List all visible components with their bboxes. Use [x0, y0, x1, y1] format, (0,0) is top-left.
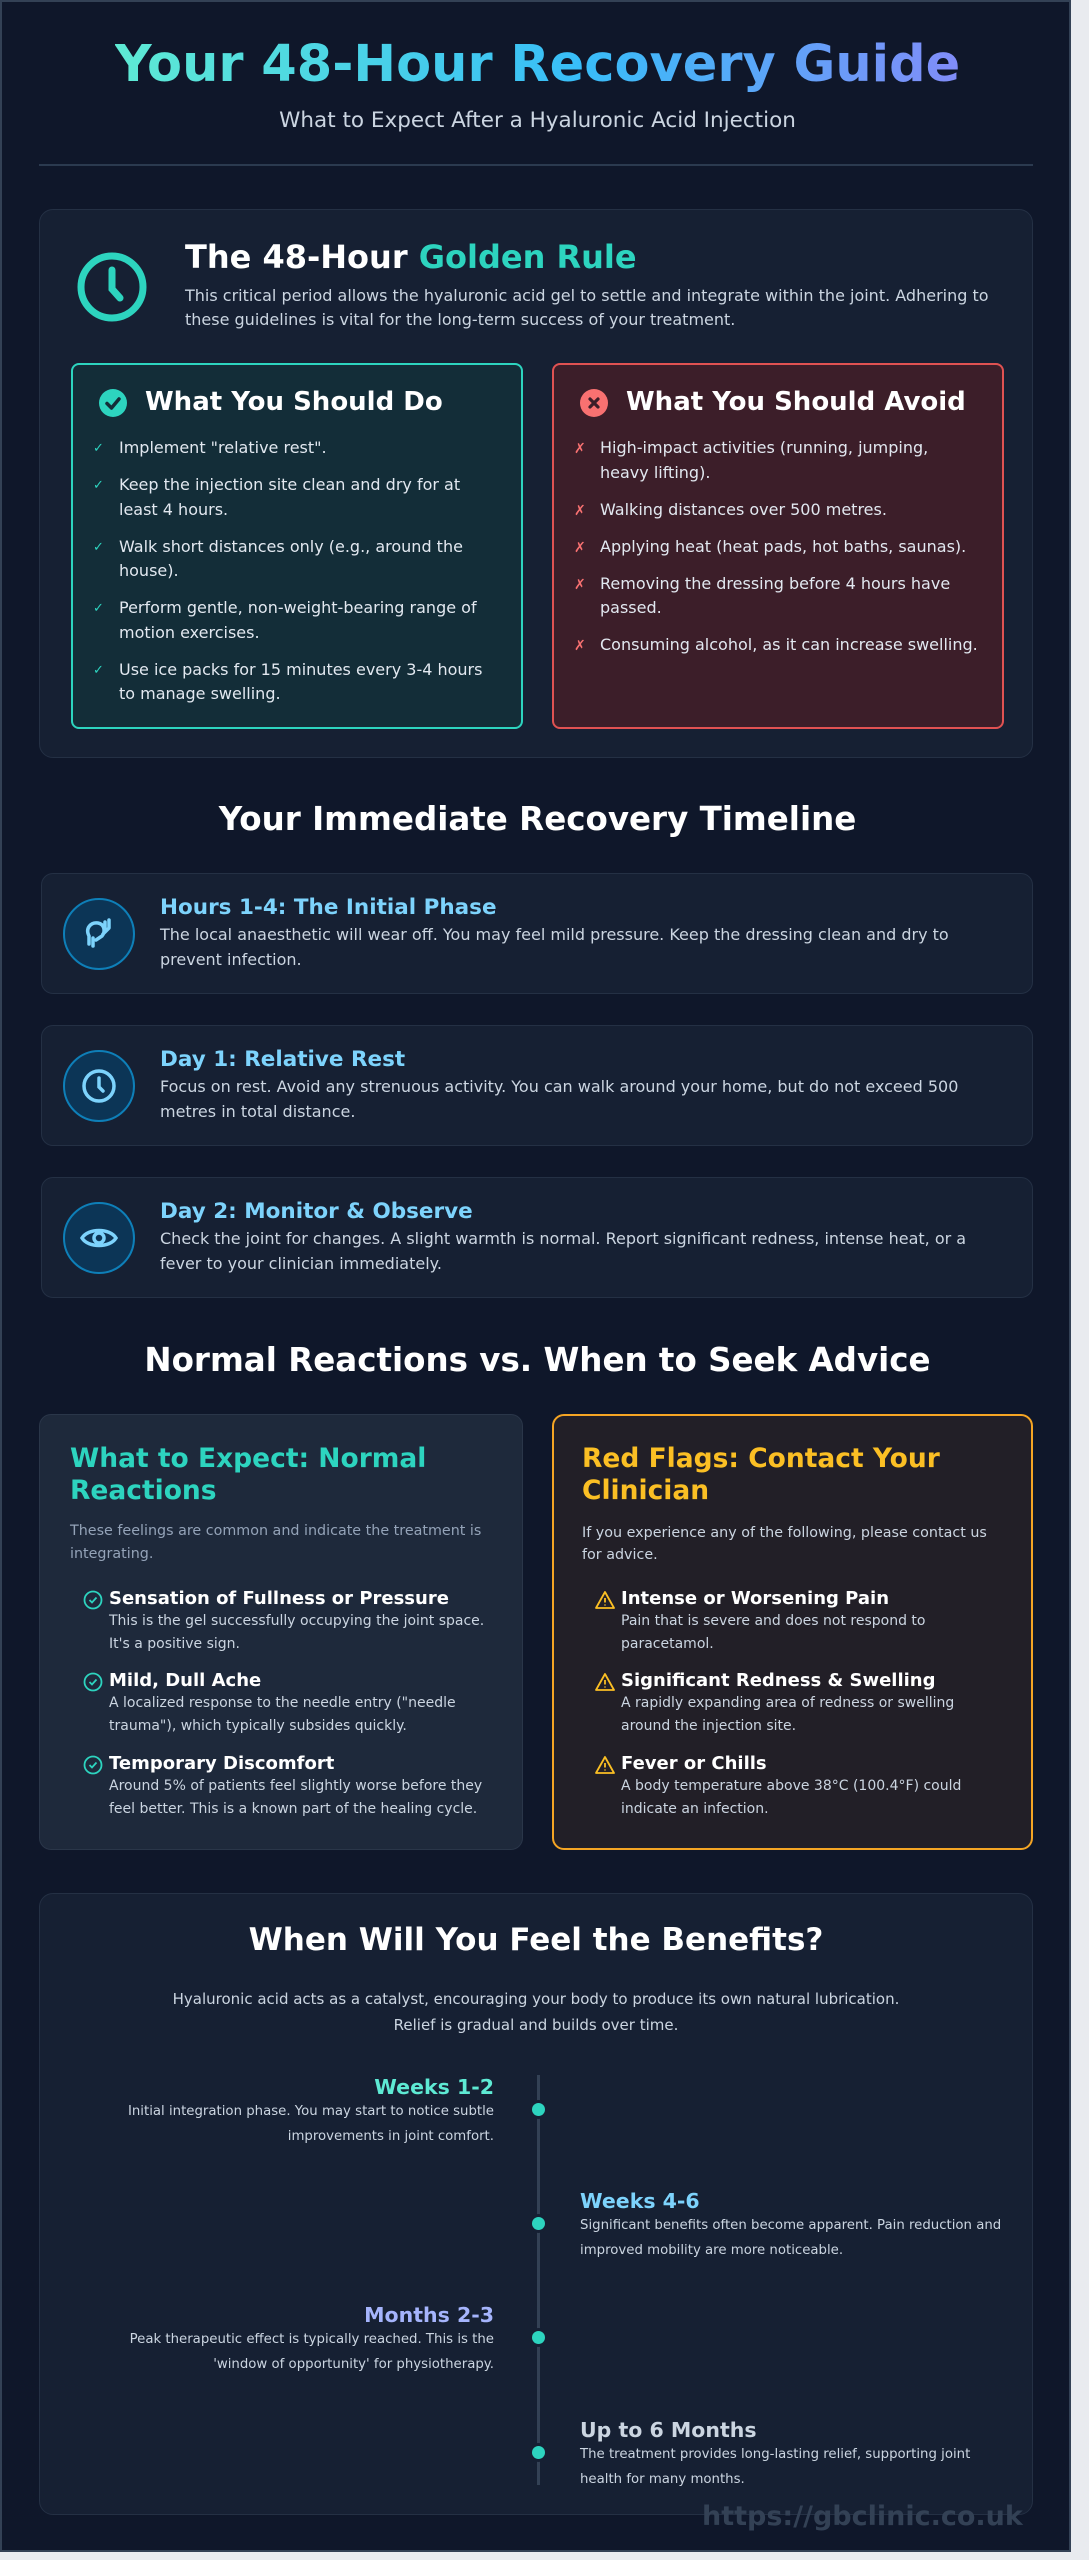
item: fever: A body temperature above 38°C (100.4°F) could indicate an infection. [621, 1778, 961, 1817]
intro: Relief is gradual and builds over time. [394, 2016, 678, 2034]
dot [532, 2446, 545, 2459]
milestone: weeks 1-2 [128, 2075, 494, 2144]
list: do: ✓ [93, 540, 104, 554]
item: pain: Intense or Worsening Pain [621, 1588, 889, 1609]
intro: Hyaluronic acid acts as a catalyst, encouraging your body to produce its own natural lubrication. [173, 1990, 899, 2008]
timeline card: day 2 [41, 1177, 1033, 1298]
heading: What to Expect: Normal Reactions [70, 1443, 426, 1506]
item: fullness: This is the gel successfully occupying the joint space. It's a positive sign. [109, 1613, 484, 1652]
heading: Red Flags: Contact Your Clinician [582, 1443, 940, 1506]
item: ache: A localized response to the needle entry ("needle trauma"), which typically subsides quickly. [109, 1695, 456, 1734]
milestone: weeks 4-6: Significant benefits often become apparent. Pain reduction and improved mobility are more noticeable. [580, 2218, 1001, 2258]
dot [532, 2331, 545, 2344]
list: avoid: ✗ [574, 441, 586, 457]
item: redness [595, 1670, 954, 1734]
milestone: weeks 4-6 [580, 2189, 1001, 2258]
heading: immediate recovery timeline: Your Immediate Recovery Timeline [219, 800, 856, 838]
item: fullness: Sensation of Fullness or Pressure [109, 1588, 449, 1609]
list: do: Implement "relative rest". [119, 438, 327, 457]
heading: When Will You Feel the Benefits? [249, 1922, 823, 1958]
intro: These feelings are common and indicate the treatment is integrating. [70, 1523, 481, 1562]
list: avoid: Consuming alcohol, as it can increase swelling. [600, 635, 978, 654]
list: do [93, 438, 482, 703]
watermark: https://gbclinic.co.uk [702, 2501, 1023, 2532]
item: pain [595, 1588, 926, 1652]
title: Your 48-Hour Recovery Guide [115, 35, 960, 94]
description: The local anaesthetic will wear off. You may feel mild pressure. Keep the dressing clean and dry to prevent infection. [160, 925, 949, 968]
title: Day 2: Monitor & Observe [160, 1199, 473, 1224]
description: This critical period allows the hyaluronic acid gel to settle and integrate within the joint. Adhering to these guidelines is vital for the long-term success of your treatment. [185, 286, 989, 329]
description: Focus on rest. Avoid any strenuous activity. You can walk around your home, but do not exceed 500 metres in total distance. [160, 1077, 958, 1120]
subtitle: What to Expect After a Hyaluronic Acid Injection [279, 108, 796, 133]
list: avoid: ✗ [574, 638, 586, 654]
list: avoid: ✗ [574, 576, 586, 592]
heading: normal vs seek advice: Normal Reactions vs. When to Seek Advice [144, 1341, 931, 1379]
milestone: weeks 4-6: Weeks 4-6 [580, 2189, 700, 2213]
panel: benefits [39, 1893, 1033, 2515]
dot [532, 2217, 545, 2230]
icon: clock [78, 252, 146, 322]
milestone: up to 6 months [580, 2418, 970, 2486]
milestone: up to 6 months: Up to 6 Months [580, 2418, 757, 2442]
heading: The 48-Hour Golden Rule [185, 238, 637, 276]
panel: red flags [552, 1414, 1033, 1850]
icon: eye [63, 1202, 135, 1274]
item: redness: Significant Redness & Swelling [621, 1670, 936, 1691]
milestone: weeks 1-2: Initial integration phase. You may start to notice subtle improvements in joint comfort. [128, 2104, 494, 2144]
title: Hours 1-4: The Initial Phase [160, 895, 497, 920]
box: what you should avoid [552, 363, 1004, 729]
item: discomfort: Around 5% of patients feel slightly worse before they feel better. This is a known part of the healing cycle. [109, 1778, 482, 1817]
list: do: Use ice packs for 15 minutes every 3-4 hours to manage swelling. [119, 660, 482, 703]
milestone: weeks 1-2: Weeks 1-2 [374, 2075, 494, 2099]
item: discomfort [84, 1753, 482, 1817]
panel: normal reactions [39, 1414, 523, 1850]
timeline card: day 1 [41, 1025, 1033, 1146]
intro [173, 1990, 899, 2034]
panel: golden rule [39, 209, 1033, 758]
timeline card: hours 1-4 [41, 873, 1033, 994]
list: do: Keep the injection site clean and dry for at least 4 hours. [119, 475, 460, 518]
item: fever: Fever or Chills [621, 1753, 767, 1774]
item: ache: Mild, Dull Ache [109, 1670, 261, 1691]
list: do: Walk short distances only (e.g., around the house). [119, 536, 463, 580]
list: avoid: Walking distances over 500 metres. [600, 500, 887, 518]
item: discomfort: Temporary Discomfort [109, 1753, 334, 1774]
list: do: ✓ [93, 478, 104, 493]
item: ache [84, 1670, 456, 1734]
milestone: up to 6 months: The treatment provides long-lasting relief, supporting joint health for many months. [580, 2447, 970, 2486]
intro: If you experience any of the following, please contact us for advice. [582, 1525, 987, 1563]
item: fullness [84, 1588, 484, 1652]
icon: clock [63, 1050, 135, 1122]
list: avoid: Removing the dressing before 4 hours have passed. [600, 574, 950, 617]
title: Day 1: Relative Rest [160, 1047, 405, 1072]
list: avoid: ✗ [574, 502, 586, 518]
list: avoid [574, 438, 978, 654]
list: do: ✓ [93, 601, 104, 616]
list: avoid: ✗ [574, 540, 586, 556]
timeline line [537, 2075, 540, 2485]
list: avoid: High-impact activities (running, jumping, heavy lifting). [600, 438, 928, 482]
milestone: months 2-3: Months 2-3 [364, 2303, 494, 2327]
box heading: What You Should Avoid [626, 387, 966, 417]
box heading: What You Should Do [145, 387, 443, 417]
description: Check the joint for changes. A slight warmth is normal. Report significant redness, intense heat, or a fever to your clinician immediately. [160, 1229, 966, 1272]
item: fever [595, 1753, 961, 1817]
milestone: months 2-3 [130, 2303, 494, 2372]
item: pain: Pain that is severe and does not respond to paracetamol. [621, 1613, 926, 1652]
box: what you should do [71, 363, 523, 729]
list: avoid: Applying heat (heat pads, hot baths, saunas). [600, 536, 966, 556]
list: do: ✓ [93, 662, 104, 678]
item: redness: A rapidly expanding area of redness or swelling around the injection site. [621, 1695, 954, 1734]
list: do: ✓ [93, 441, 104, 456]
milestone: months 2-3: Peak therapeutic effect is typically reached. This is the 'window of opportunity' for physiotherapy. [130, 2332, 494, 2372]
icon: x circle [580, 389, 608, 417]
icon: check circle [99, 389, 127, 417]
icon: hand [63, 898, 135, 970]
list: do: Perform gentle, non-weight-bearing range of motion exercises. [119, 598, 477, 642]
dot [532, 2103, 545, 2116]
